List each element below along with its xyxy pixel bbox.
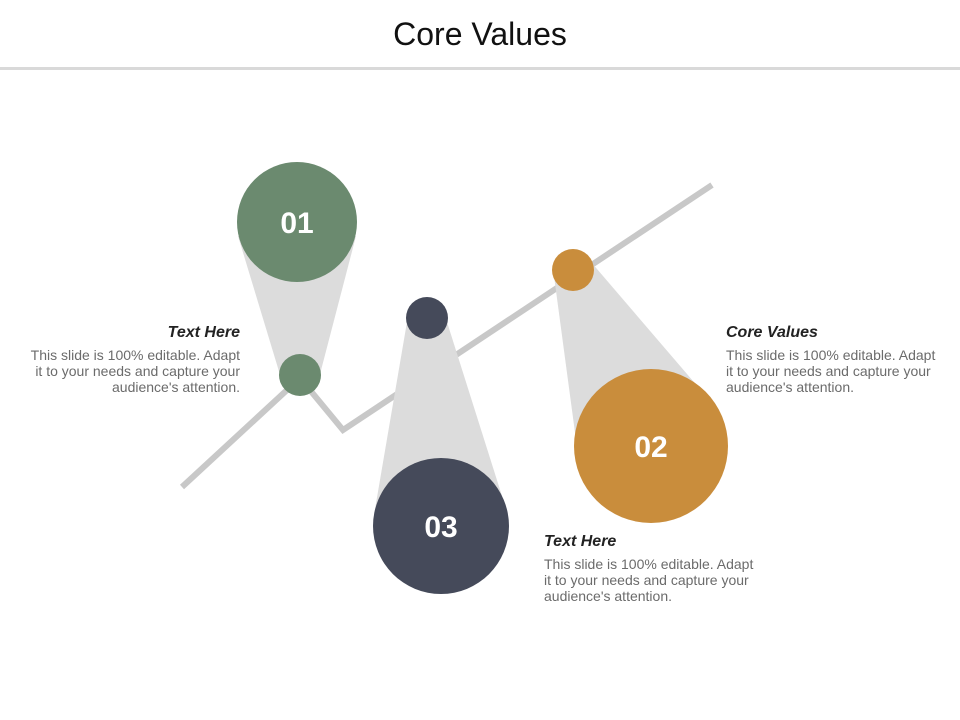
text block bottom: [544, 533, 754, 604]
trend line: [182, 185, 712, 487]
title: Core Values: [393, 16, 567, 52]
circle 01: [237, 162, 357, 282]
text block left: Text Here: [168, 324, 240, 341]
text block right: Core Values: [726, 324, 818, 341]
dot orange: [552, 249, 594, 291]
text block bottom: Text Here: [544, 533, 616, 550]
text block right: This slide is 100% editable. Adapt it to your needs and capture your audience's attention.: [726, 347, 935, 395]
text block right: [726, 324, 936, 395]
circle 02: 02: [634, 431, 668, 464]
cone 01: [238, 236, 356, 378]
cone 03: [374, 322, 508, 515]
cone 02: [554, 262, 705, 455]
circle 03: 03: [424, 511, 458, 544]
dot green: [279, 354, 321, 396]
text block left: [30, 324, 240, 395]
text block left: This slide is 100% editable. Adapt it to your needs and capture your audience's attention.: [31, 347, 240, 395]
circle 01: 01: [280, 207, 314, 240]
dot navy: [406, 297, 448, 339]
circle 03: [373, 458, 509, 594]
circle 02: [574, 369, 728, 523]
text block bottom: This slide is 100% editable. Adapt it to your needs and capture your audience's attention.: [544, 556, 753, 604]
